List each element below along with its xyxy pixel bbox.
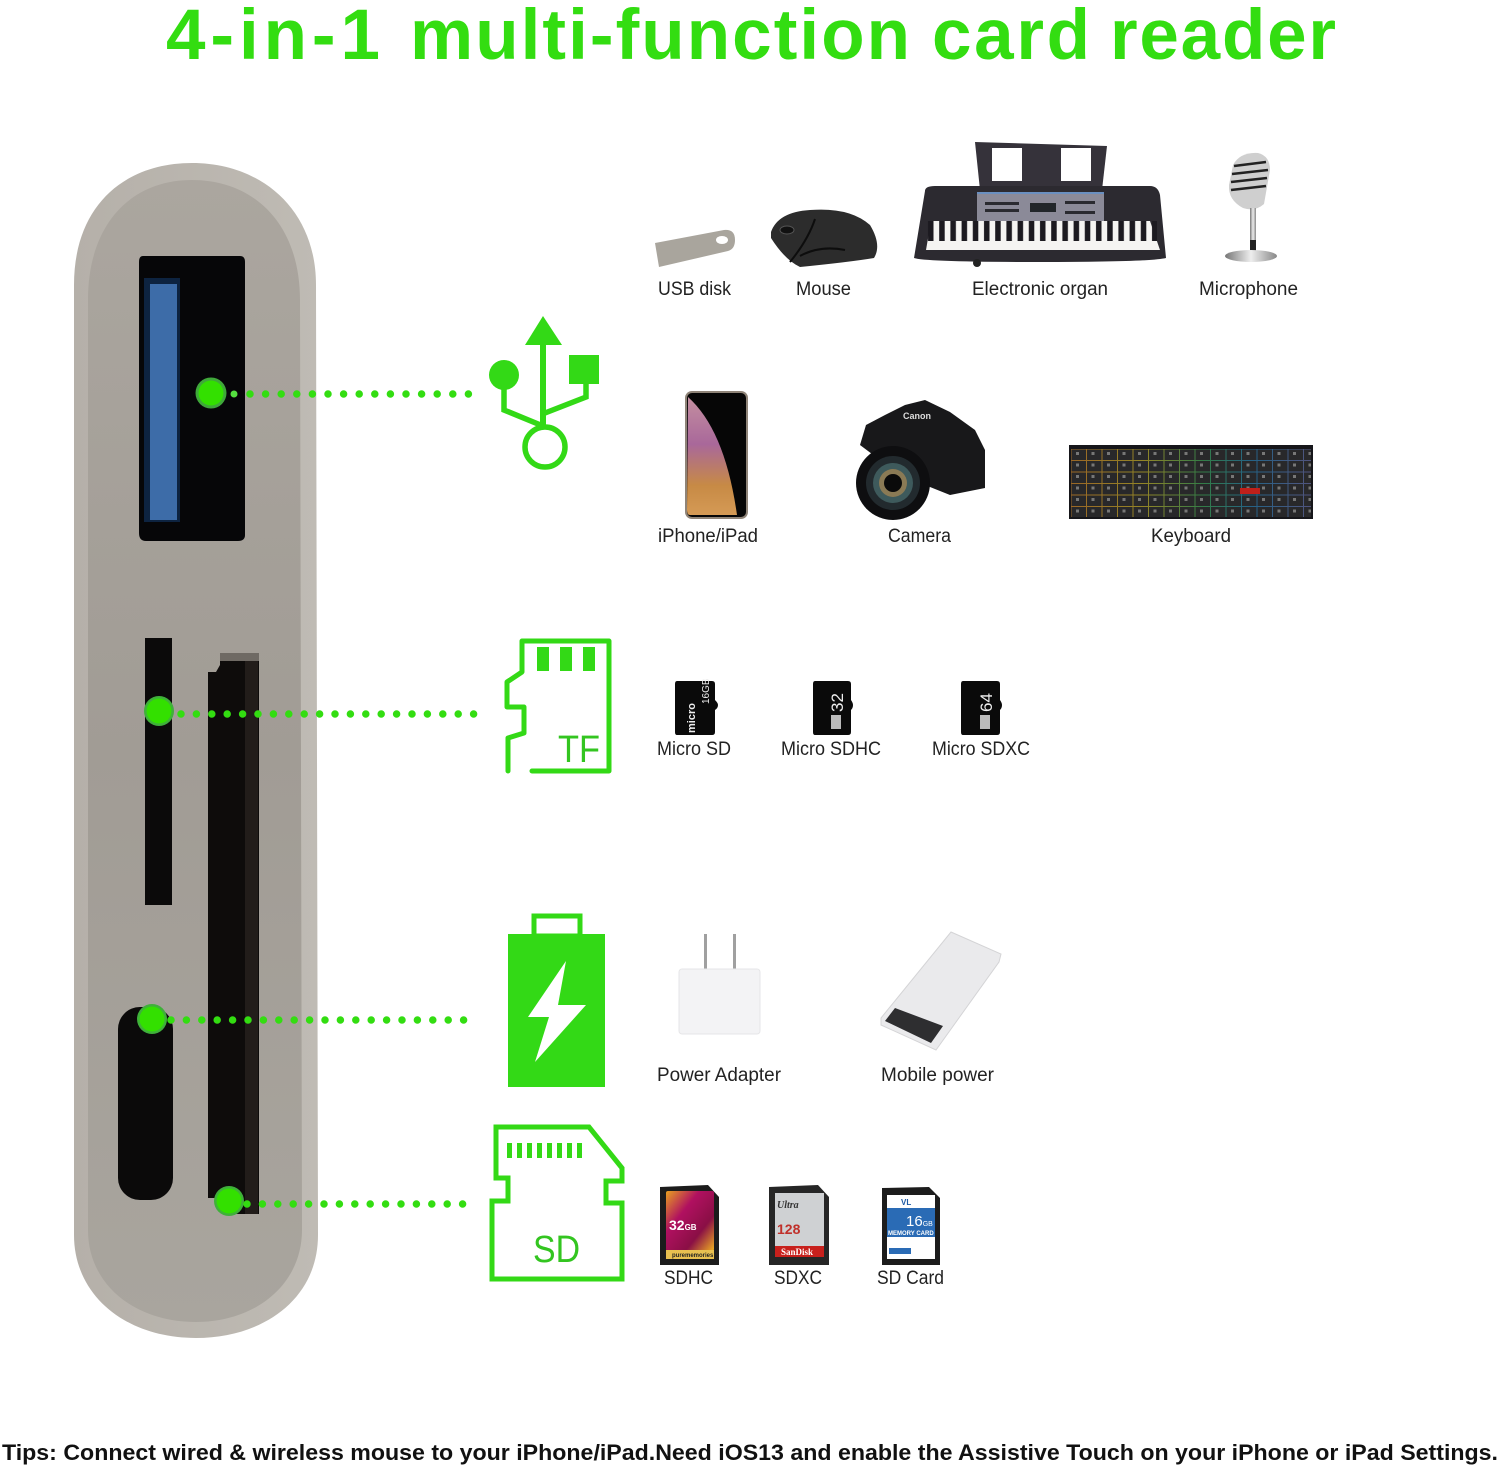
micro SDXC card: 64 xyxy=(977,693,996,712)
keyboard xyxy=(1069,445,1313,547)
title xyxy=(166,0,1336,75)
mobile power bank xyxy=(881,932,1001,1086)
SDXC card xyxy=(769,1185,829,1289)
USB port xyxy=(139,256,245,541)
micro SD card: Micro SD xyxy=(657,739,731,760)
microphone xyxy=(1199,153,1298,300)
connector: USB dotted line xyxy=(196,378,470,408)
power adapter: Power Adapter xyxy=(657,1065,782,1086)
electronic organ: Electronic organ xyxy=(972,279,1108,300)
card reader device xyxy=(74,163,318,1338)
icon: USB symbol xyxy=(489,316,599,467)
power adapter xyxy=(657,934,782,1086)
SD card: MEMORY CARD xyxy=(888,1231,934,1237)
USB disk: USB disk xyxy=(658,279,731,300)
keyboard: Keyboard xyxy=(1151,526,1231,547)
micro SDHC card: Micro SDHC xyxy=(781,739,881,760)
micro SD card: 16GB xyxy=(701,678,712,704)
charging port xyxy=(118,1007,173,1200)
mobile power bank: Mobile power xyxy=(881,1065,995,1086)
icon: battery charging xyxy=(508,916,605,1087)
camera xyxy=(856,400,985,547)
tips note: Tips: Connect wired & wireless mouse to your iPhone/iPad.Need iOS13 and enable the Assistive Touch on your iPhone or iPad Settings. xyxy=(2,1440,1498,1465)
micro SDHC card: 32 xyxy=(828,693,847,712)
SD card: VL xyxy=(901,1198,911,1207)
device body xyxy=(74,163,318,1338)
device face xyxy=(88,180,302,1322)
micro SD card xyxy=(657,678,731,760)
micro SDXC card xyxy=(932,681,1030,760)
SDXC card: SanDisk xyxy=(781,1247,813,1257)
micro SDHC card xyxy=(781,681,881,760)
SDHC card: 32GB xyxy=(669,1217,697,1233)
camera: Camera xyxy=(888,526,951,547)
TF card slot xyxy=(145,638,172,905)
micro SD card: micro xyxy=(686,703,698,733)
connector: SD dotted line xyxy=(214,1186,466,1216)
USB disk xyxy=(655,230,735,300)
SDHC card: purememories xyxy=(672,1253,714,1259)
SDXC card: Ultra xyxy=(777,1200,799,1211)
SDXC card: 128 xyxy=(777,1221,801,1237)
iPhone: iPhone/iPad xyxy=(658,526,758,547)
microphone: Microphone xyxy=(1199,279,1298,300)
camera: Canon xyxy=(903,411,931,421)
icon: TF card: TF xyxy=(558,729,600,771)
connector: power dotted line xyxy=(137,1004,467,1034)
SD card: 16GB xyxy=(906,1213,933,1230)
micro SDXC card: Micro SDXC xyxy=(932,739,1030,760)
icon: SD card xyxy=(492,1127,622,1279)
connector: TF dotted line xyxy=(144,696,476,726)
SDXC card: SDXC xyxy=(774,1268,822,1289)
SD card xyxy=(877,1187,944,1289)
SD card slot xyxy=(208,653,259,1214)
iPhone xyxy=(658,391,758,547)
electronic organ xyxy=(914,142,1166,300)
icon: SD card: SD xyxy=(533,1229,580,1271)
SDHC card: SDHC xyxy=(664,1268,713,1289)
mouse xyxy=(771,210,877,300)
icon: TF card xyxy=(507,641,609,771)
SDHC card xyxy=(660,1185,719,1289)
SD card: SD Card xyxy=(877,1268,944,1289)
mouse: Mouse xyxy=(796,279,851,300)
